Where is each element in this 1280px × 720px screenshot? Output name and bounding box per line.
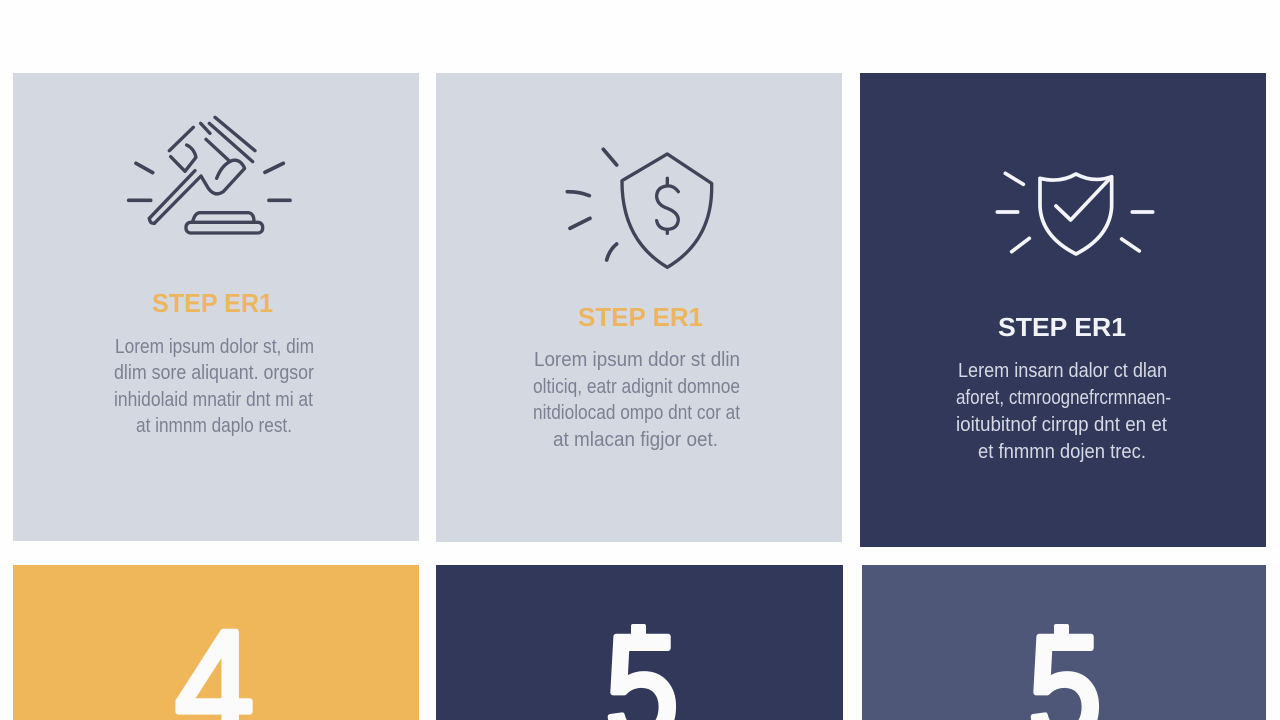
text block: step 1 description: inhidolaid mnatir dnt mi at (114, 389, 313, 411)
heading: step 3: STEP ER1 (998, 312, 1126, 342)
panel: step card 3 (860, 73, 1266, 547)
text block: step 1 description: dlim sore aliquant. orgsor (114, 362, 314, 384)
text block: step 3 description (956, 360, 1171, 463)
panel: step card 2 (436, 73, 842, 542)
panel: number 5 second (862, 565, 1266, 720)
panel: number 4 (13, 565, 419, 720)
text block: step 2 description: nitdiolocad ompo dnt cor at (533, 402, 740, 424)
text block: step 2 description: at mlacan figjor oet. (553, 429, 718, 451)
text block: step 2 description (533, 349, 740, 451)
icon: gavel (129, 117, 290, 233)
panel: number 5 (436, 565, 843, 720)
text block: step 3 description: et fnmmn dojen trec. (978, 441, 1146, 463)
text block: step 3 description: ioitubitnof cirrqp dnt en et (956, 414, 1167, 436)
text block: step 2 description: olticiq, eatr adignit domnoe (533, 376, 740, 398)
text block: step 3 description: aforet, ctmroognefrcrmnaen- (956, 387, 1171, 409)
heading: step 2: STEP ER1 (578, 302, 703, 332)
text block: step 3 description: Lerem insarn dalor ct dlan (958, 360, 1167, 382)
text block: step 1 description (114, 336, 314, 437)
text block: step 1 description: Lorem ipsum dolor st, dim (115, 336, 314, 358)
panel: step card 1 (13, 73, 419, 541)
icon: shield with check mark (997, 173, 1153, 254)
text block: step 2 description: Lorem ipsum ddor st dlin (534, 349, 740, 371)
text block: step 1 description: at inmnm daplo rest. (136, 415, 292, 437)
heading: step 1: STEP ER1 (152, 288, 273, 318)
icon: shield with dollar sign (567, 149, 712, 267)
